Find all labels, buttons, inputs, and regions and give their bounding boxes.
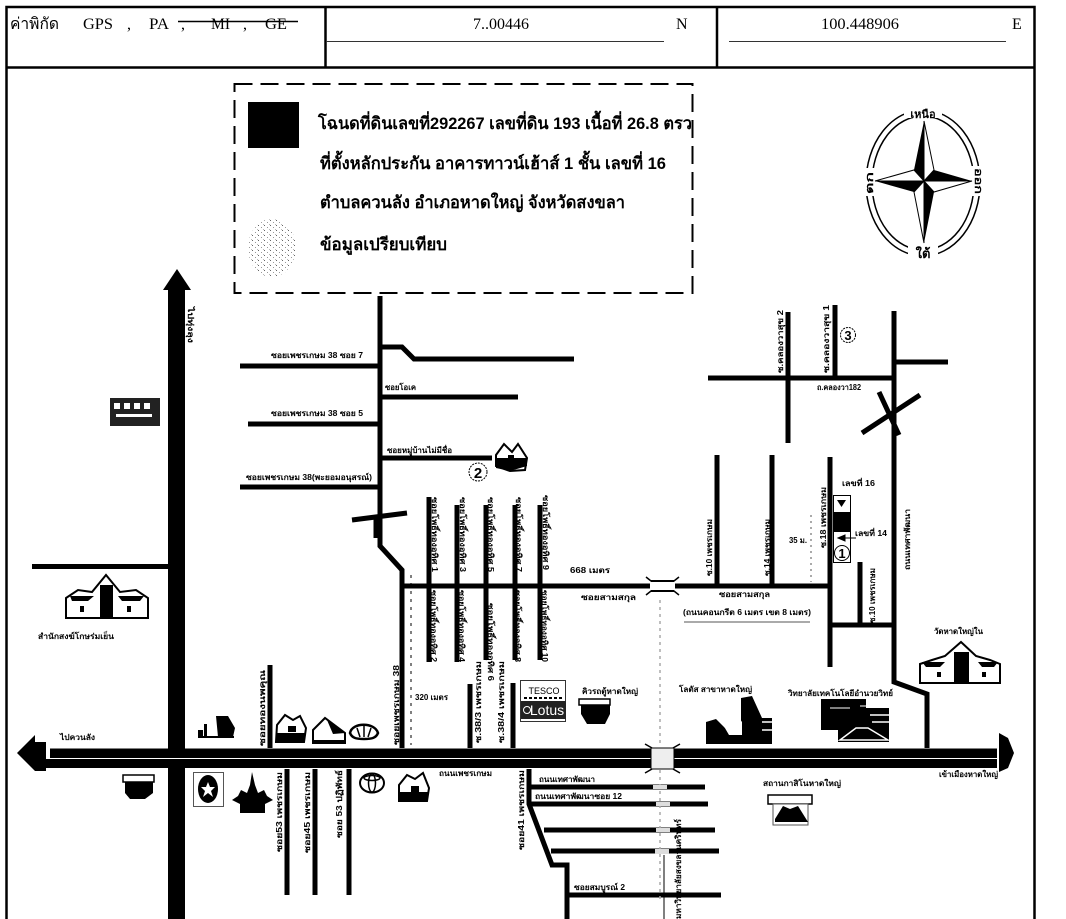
- latitude cell: N: [676, 16, 688, 33]
- icon: flat building left of road: [198, 716, 235, 738]
- place labels: สถานกาสิโนหาดใหญ่: [763, 778, 841, 789]
- coordinates label cell: ค่าพิกัด: [10, 16, 59, 33]
- road labels horizontal: ซอยเพชรเกษม 38(พะยอมอนุสรณ์): [246, 472, 372, 483]
- road labels reading downward: ซอยโพธิ์ทองอุทิศ 6: [485, 603, 497, 682]
- road labels horizontal: ถ.คลองวา182: [817, 383, 861, 392]
- coordinates label cell: PA: [149, 16, 169, 33]
- icon: van station: [579, 699, 610, 724]
- icon: Tesco Lotus sign: TESCO: [528, 686, 560, 696]
- road labels reading downward: [428, 495, 552, 682]
- road labels reading upward: ซ.10 เพชรเกษม: [868, 568, 877, 623]
- road labels reading upward: ซ.10 เพชรเกษม: [705, 519, 714, 576]
- marker 1: [834, 546, 850, 561]
- marker 2: [469, 463, 487, 482]
- road labels horizontal: เลขที่ 14: [855, 527, 888, 538]
- road labels horizontal: 320 เมตร: [415, 693, 449, 702]
- icon: temple Hat Yai Nai: [920, 642, 1000, 683]
- icon: Shell logo: [350, 725, 378, 739]
- road labels reading upward: ซอย45 เพชรเกษม: [303, 772, 312, 853]
- dashed distance lines: [411, 515, 811, 745]
- road labels reading upward: ซอยทองนพคุณ: [258, 669, 268, 746]
- coordinates label cell: ,: [243, 16, 247, 33]
- legend panel: [234, 84, 692, 293]
- marker 1: 1: [838, 546, 846, 561]
- icon: technology college: [821, 699, 889, 742]
- road labels reading downward: ซอยโพธิ์ทองอุทิศ 3: [457, 497, 469, 573]
- legend: plot description line 2: ที่ตั้งหลักประกัน อาคารทาวน์เฮ้าส์ 1 ชั้น เลขที่ 16: [320, 150, 666, 173]
- road labels reading upward: มหาวิทยาลัยสงขลานครินทร์: [673, 818, 683, 919]
- road labels reading upward: ซ.38/4 เพชรเกษม: [497, 661, 506, 743]
- place labels: วัดหาดใหญ่ใน: [934, 626, 984, 637]
- place labels: ไปควนลัง: [59, 732, 95, 742]
- road labels horizontal: ซอยหมู่บ้านไม่มีชื่อ: [387, 444, 452, 456]
- icon: shrine sign: [768, 795, 812, 825]
- icon: sign with building west: [123, 775, 154, 799]
- latitude cell: [326, 16, 688, 42]
- longitude cell: E: [1012, 16, 1022, 33]
- road labels reading upward: [258, 304, 912, 919]
- road labels horizontal: ถนนเพชรเกษม: [439, 769, 492, 778]
- road labels horizontal: ซอยสามสกุล: [581, 593, 636, 603]
- road labels horizontal: 668 เมตร: [570, 566, 611, 575]
- south side sois: [287, 769, 721, 919]
- road labels reading downward: ซอยโพธิ์ทองอุทิศ 2: [428, 590, 440, 663]
- road labels reading downward: ซอยโพธิ์ทองอุทิศ 5: [485, 497, 497, 573]
- icon: house at marker 2: [496, 444, 527, 471]
- road labels reading upward: ซอยเพชรเกษม 38: [392, 664, 401, 745]
- coordinates label cell: MI: [211, 16, 230, 33]
- icon: house with roof: [313, 718, 345, 743]
- canal and bridges: [645, 577, 680, 919]
- coordinates label cell: GPS: [83, 16, 113, 33]
- road labels horizontal: ซอยเพชรเกษม 38 ซอย 7: [271, 351, 364, 360]
- road labels reading downward: ซอยโพธิ์ทองอุทิศ 10: [539, 590, 551, 663]
- compass rose: ออก: [972, 168, 983, 194]
- icon: Toyota logo: [360, 774, 384, 792]
- road labels reading upward: ซ.คลองวาสุข 1: [822, 304, 832, 373]
- place labels: เข้าเมืองหาดใหญ่: [939, 769, 998, 780]
- place labels: วิทยาลัยเทคโนโลยีอำนวยวิทย์: [787, 688, 893, 698]
- marker 3: 3: [844, 328, 852, 343]
- road labels reading downward: ซอยโพธิ์ทองอุทิศ 7: [513, 497, 525, 573]
- coordinates label cell: [10, 16, 298, 33]
- Soi Sam Sakul and side sois: [270, 455, 831, 748]
- road labels horizontal: (ถนนคอนกรีต 6 เมตร เขต 8 เมตร): [683, 607, 811, 617]
- coordinates label cell: ,: [127, 16, 131, 33]
- longitude cell: 100.448906: [821, 16, 899, 33]
- road labels reading downward: ซอยโพธิ์ทองอุทิศ 8: [512, 590, 524, 663]
- icon: temple west: [66, 575, 148, 618]
- road labels horizontal: ซอยโอเค: [385, 382, 416, 392]
- place labels: [38, 626, 998, 789]
- coordinates label cell: GE: [265, 16, 287, 33]
- legend: comparable dotted circle: [248, 219, 296, 277]
- road labels horizontal: ซอยสามสกุล: [719, 590, 770, 600]
- road labels horizontal: 35 ม.: [789, 536, 807, 545]
- road labels reading upward: ซ.18 เพชรเกษม: [819, 487, 828, 548]
- longitude cell: [729, 16, 1022, 42]
- compass rose: [860, 102, 986, 262]
- road labels reading upward: ซอย41 เพชรเกษม: [517, 770, 526, 850]
- place labels: สำนักสงฆ์โกษร่มเย็น: [38, 630, 115, 641]
- road labels horizontal: เลขที่ 16: [842, 477, 876, 488]
- road labels horizontal: ถนนเทศาพัฒนาซอย 12: [535, 792, 623, 801]
- road labels reading upward: ซ.38/3 เพชรเกษม: [474, 661, 483, 743]
- legend: plot description line 1: โฉนดที่ดินเลขที่292267 เลขที่ดิน 193 เนื้อที่ 26.8 ตรว: [317, 110, 692, 133]
- icon: houses north of road: [276, 715, 306, 743]
- icon: building near highway: [110, 398, 160, 426]
- road labels reading upward: ซอย 53 ปฏิพัทธ์: [334, 770, 344, 838]
- road labels horizontal: [246, 351, 888, 893]
- road labels reading upward: ถนนเทศาพัฒนา: [903, 509, 912, 570]
- marker 2: 2: [474, 465, 482, 482]
- road labels reading upward: ซ.14 เพชรเกษม: [763, 519, 772, 576]
- icon: Tesco Lotus sign: Lotus: [530, 702, 564, 718]
- road labels reading upward: ซอย53 เพชรเกษม: [275, 772, 284, 852]
- icon: houses south of road: [399, 773, 429, 802]
- road labels reading downward: ซอยโพธิ์ทองอุทิศ 1: [429, 497, 441, 573]
- legend: subject plot black square: [248, 102, 299, 148]
- Phetkasem main road with arrows: [17, 733, 1014, 772]
- place labels: คิวรถตู้หาดใหญ่: [582, 686, 638, 697]
- road labels horizontal: ถนนเทศาพัฒนา: [539, 775, 595, 784]
- compass rose: เหนือ: [910, 108, 936, 121]
- compass rose: ใต้: [916, 245, 930, 261]
- icon: star logo: [194, 772, 224, 806]
- marker 3: [840, 328, 856, 343]
- road labels reading upward: ซ.คลองวาสุข 2: [776, 309, 786, 373]
- coordinates label cell: ,: [181, 16, 185, 33]
- legend: comparable data label: ข้อมูลเปรียบเทียบ: [320, 234, 447, 256]
- compass rose: ตก: [865, 172, 876, 194]
- highway direction label: ไปทุ่งลุง: [185, 306, 196, 343]
- road labels horizontal: ซอยสมบูรณ์ 2: [574, 882, 626, 893]
- subject plot marker: [833, 496, 856, 562]
- west side road network: [32, 296, 574, 748]
- road labels reading downward: ซอยโพธิ์ทองอุทิศ 4: [456, 590, 468, 663]
- latitude cell: 7..00446: [473, 16, 529, 33]
- icon: Lotus store building: [706, 696, 772, 744]
- icon: pagoda: [232, 772, 273, 813]
- main north-south highway with arrow: [163, 269, 191, 919]
- road labels horizontal: ซอยเพชรเกษม 38 ซอย 5: [271, 409, 364, 418]
- place labels: โลตัส สาขาหาดใหญ่: [678, 684, 752, 695]
- east side road network: [708, 305, 948, 748]
- legend: plot description line 3: ตำบลควนลัง อำเภอหาดใหญ่ จังหวัดสงขลา: [320, 192, 625, 213]
- icon: Tesco Lotus sign: [520, 680, 566, 722]
- road labels reading downward: ซอยโพธิ์ทองอุทิศ 9: [540, 495, 552, 571]
